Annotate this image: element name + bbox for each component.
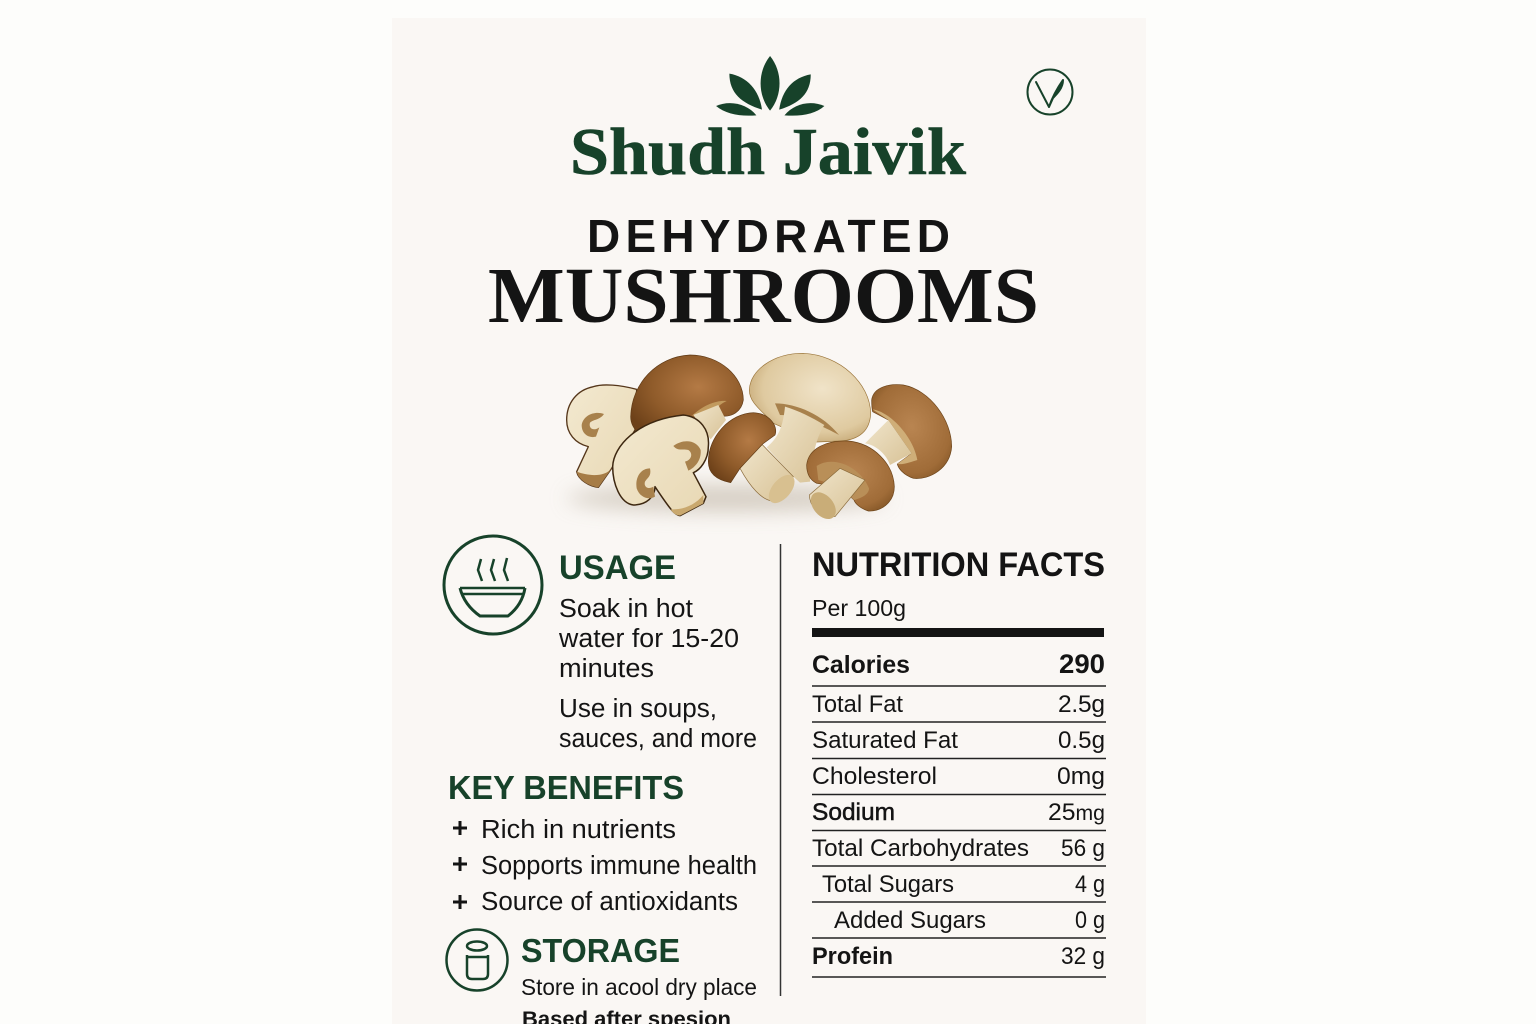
section: usage	[444, 536, 757, 753]
rows: nutrients: Profein	[812, 943, 893, 970]
logo: leaf emblem	[716, 56, 824, 116]
table rules	[812, 686, 1106, 977]
text: soak instructions: Use in soups,	[559, 695, 717, 723]
mushroom: large pale	[749, 353, 871, 483]
mushroom: small bottom right	[806, 441, 894, 524]
text: soak instructions: sauces, and more	[559, 725, 757, 753]
row: calories: Calories	[812, 651, 910, 679]
rows: nutrients: Total Carbohydrates	[812, 835, 1029, 862]
rows: nutrients: 25mg	[1048, 799, 1105, 826]
mushroom: front slice	[613, 415, 709, 516]
rows: nutrients: 0 g	[1075, 907, 1105, 934]
icon: jar	[446, 930, 508, 990]
section: storage	[446, 930, 757, 1024]
rows: nutrients: 0.5g	[1058, 727, 1105, 754]
list: benefits: Rich in nutrients	[481, 816, 676, 844]
text: storage instructions: Store in acool dry place	[521, 974, 757, 1000]
rows: nutrients: 0mg	[1057, 763, 1105, 790]
brand name: Shudh Jaivik	[570, 115, 967, 189]
text: soak instructions	[558, 595, 757, 753]
text: soak instructions: water for 15-20	[558, 625, 739, 653]
icon: vegetarian badge	[1028, 70, 1072, 114]
panel: nutrition facts	[812, 546, 1106, 977]
mushroom: back left slice	[567, 385, 637, 487]
illustration: mushrooms	[567, 353, 952, 524]
panel: label background	[392, 18, 1146, 1024]
list: benefits: Sopports immune health	[481, 852, 757, 880]
text: soak instructions: minutes	[559, 655, 654, 683]
list: benefits	[453, 816, 757, 916]
text: serving size: Per 100g	[812, 595, 906, 621]
text: soak instructions: Soak in hot	[559, 595, 693, 623]
rows: nutrients: Added Sugars	[834, 907, 986, 934]
rows: nutrients: Cholesterol	[812, 763, 937, 790]
rows: nutrients	[812, 691, 1105, 970]
subtitle: dehydrated: DEHYDRATED	[587, 210, 950, 262]
mushroom: small middle	[708, 413, 800, 508]
list: benefits: Source of antioxidants	[481, 888, 738, 916]
thick rule	[812, 628, 1104, 637]
heading: key benefits: KEY BENEFITS	[448, 769, 684, 806]
row: calories	[812, 649, 1105, 679]
heading: storage: STORAGE	[521, 932, 680, 969]
rows: nutrients: 4 g	[1075, 871, 1105, 898]
rows: nutrients: Total Fat	[812, 691, 903, 718]
mushroom: right brown	[865, 385, 952, 478]
rows: nutrients: 2.5g	[1058, 691, 1105, 718]
title: mushrooms: MUSHROOMS	[488, 253, 1039, 340]
rows: nutrients: 56 g	[1061, 835, 1105, 862]
row: calories: 290	[1059, 649, 1105, 679]
rows: nutrients: 32 g	[1061, 943, 1105, 970]
heading: nutrition facts: NUTRITION FACTS	[812, 546, 1105, 584]
rows: nutrients: Sodium	[812, 799, 895, 826]
heading: usage: USAGE	[559, 549, 676, 587]
icon: steaming bowl	[444, 536, 542, 634]
rows: nutrients: Saturated Fat	[812, 727, 958, 754]
rows: nutrients: Total Sugars	[822, 871, 954, 898]
divider	[780, 544, 782, 996]
section: key benefits	[448, 769, 757, 916]
mushroom: brown back	[631, 355, 743, 439]
